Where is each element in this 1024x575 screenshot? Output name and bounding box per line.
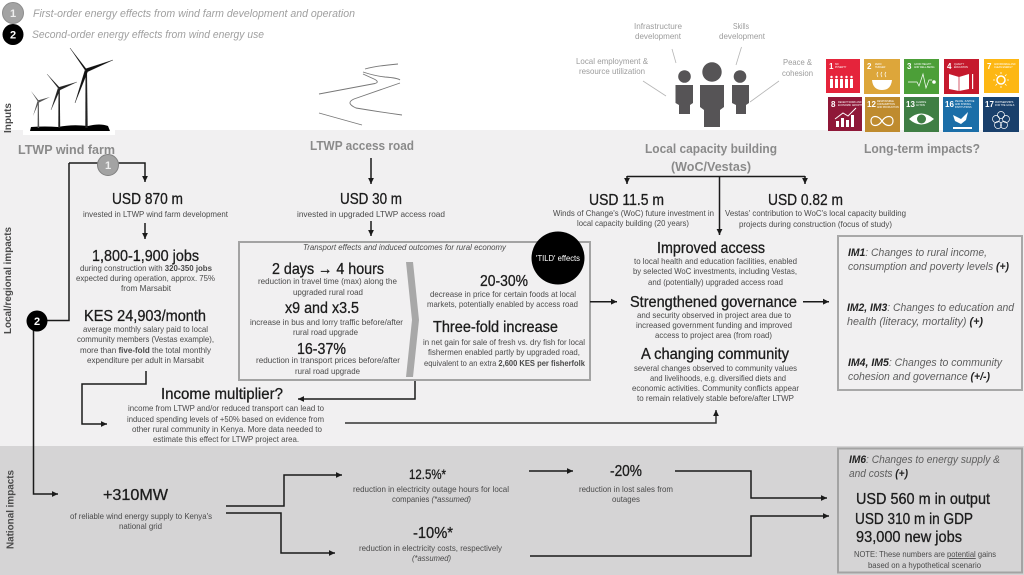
column: wind farm investment: USD 870 m (112, 191, 183, 208)
stat: transport prices: rural road upgrade (295, 366, 360, 376)
text block: salary: community members (Vestas example), (77, 334, 214, 344)
stat: fish sales (423, 319, 585, 368)
SDG 4: 4 (947, 62, 952, 71)
text block: strengthened governance (630, 294, 797, 340)
IM6 note: NOTE: These numbers are potential gains (854, 549, 996, 559)
IM6 heading: IM6: Changes to energy supply & (849, 454, 1000, 466)
text block: WoC investment: local capacity building (20 years) (577, 218, 689, 228)
SDG 4 (944, 59, 979, 94)
column: access road investment: USD 30 m (340, 191, 402, 208)
SDG 12: CONSUMPTION (877, 103, 895, 106)
SDG 1: 1 (829, 62, 834, 71)
text block: a changing community: to remain relatively stable before/after LTWP (637, 393, 794, 403)
heading: Local capacity building (645, 141, 777, 174)
text block: salary: KES 24,903/month (84, 308, 206, 325)
IM1: consumption and poverty levels (+) (848, 261, 1009, 273)
SDG 3 (904, 59, 939, 94)
text block: outage hours: companies (*assumed) (392, 494, 471, 504)
stat: food prices: decrease in price for certain foods at local (430, 289, 576, 299)
stat: travel time: reduction in travel time (max) along the (258, 276, 397, 286)
IM4, IM5: IM4, IM5: Changes to community (848, 357, 1003, 369)
SDG 1: NO (835, 63, 839, 66)
icon: people with capacity labels: development (719, 31, 766, 41)
text block: a changing community (632, 346, 799, 403)
row label: Inputs: Inputs (3, 103, 14, 133)
text block: outage hours (353, 467, 509, 504)
icon: winding road (319, 64, 402, 125)
stat: travel time (258, 261, 397, 297)
text block: +310MW: national grid (119, 521, 162, 531)
text block: jobs: during construction with 320-350 jobs (80, 263, 212, 273)
text block: improved access (633, 240, 797, 287)
text block: jobs: expected during operation, approx. 75% (76, 273, 215, 283)
IM1 (848, 247, 1009, 273)
icon grid: SDG tiles (826, 59, 1019, 132)
text block: salary: average monthly salary paid to local (83, 324, 208, 334)
IM4, IM5: cohesion and governance (+/-) (848, 371, 990, 383)
SDG 4: QUALITY (954, 63, 965, 66)
SDG 17: PARTNERSHIPS (995, 101, 1014, 104)
text block: Vestas contribution: Vestas' contribution to WoC's local capacity building (725, 208, 906, 218)
SDG 13: CLIMATE (916, 101, 927, 104)
SDG 16: 16 (945, 100, 954, 109)
SDG 8 (828, 97, 863, 131)
arrows: capacity building branch (627, 176, 805, 184)
text block: strengthened governance: increased government funding and improved (636, 320, 792, 330)
SDG 3: GOOD HEALTH (914, 63, 931, 66)
IM6 figures (855, 491, 991, 546)
SDG 8: ECONOMIC GROWTH (838, 104, 863, 107)
text block: strengthened governance: Strengthened governance (630, 294, 797, 311)
text block: outage hours: reduction in electricity outage hours for local (353, 484, 509, 494)
text block: income multiplier: Income multiplier? (161, 386, 283, 403)
text block: lost sales (579, 463, 673, 504)
text block: salary: expenditure per adult in Marsabit (87, 355, 205, 365)
arrow: transport box to outcomes (590, 301, 617, 303)
text block: jobs: 1,800-1,900 jobs (92, 248, 199, 265)
stat: travel time: 2 days → 4 hours (272, 261, 384, 278)
text block: WoC investment: USD 11.5 m (589, 192, 664, 209)
SDG 17: 17 (985, 100, 994, 109)
arrow: outcomes to long-term impacts (803, 301, 829, 303)
icon: people with capacity labels (576, 21, 813, 127)
SDG 7: AFFORDABLE AND (994, 63, 1016, 66)
SDG 2: HUNGER (875, 66, 886, 69)
SDG 7: CLEAN ENERGY (994, 66, 1013, 69)
arrow: supply to outage reduction (226, 475, 342, 506)
badge: second-order: 2 (34, 316, 40, 328)
stat: fish sales: in net gain for sale of fresh vs. dry fish for local (423, 337, 585, 347)
legend item 1: First-order energy effects from wind farm development and operation (33, 8, 355, 20)
text block: Vestas contribution: projects during construction (focus of study) (739, 219, 892, 229)
TILD badge (532, 232, 584, 284)
heading: LTWP access road: LTWP access road (310, 138, 414, 153)
text block: +310MW: of reliable wind energy supply to Kenya's (70, 511, 212, 521)
stat: food prices (427, 273, 578, 309)
arrow: transport box to income multiplier (298, 381, 415, 399)
SDG 1: POVERTY (835, 66, 847, 69)
legend item 2: 2 (10, 30, 16, 42)
SDG 17 (983, 97, 1019, 132)
SDG 16: INSTITUTIONS (955, 106, 972, 109)
SDG 2: 2 (867, 62, 872, 71)
column: wind farm investment (83, 191, 229, 219)
text block: strengthened governance: and security observed in project area due to (637, 310, 791, 320)
row label: Local/regional impacts: Local/regional impacts (3, 227, 14, 334)
SDG 16: PEACE, JUSTICE (955, 100, 975, 103)
people icon (676, 62, 749, 127)
arrow: road investment to transport box (370, 221, 372, 236)
IM1: IM1: Changes to rural income, (848, 247, 987, 259)
IM2, IM3: health (literacy, mortality) (+) (847, 316, 983, 328)
SDG 12: AND PRODUCTION (877, 106, 899, 109)
stat: food prices: markets, potentially enabled by access road (427, 299, 578, 309)
icon: people with capacity labels: cohesion (782, 68, 813, 78)
text block: a changing community: economic activities. Community conflicts appear (632, 383, 799, 393)
IM2, IM3: IM2, IM3: Changes to education and (847, 302, 1015, 314)
text block: jobs: from Marsabit (121, 283, 172, 293)
text block: Vestas contribution (725, 192, 906, 229)
text block: electricity costs: -10%* (413, 525, 453, 542)
arrow: investment to jobs (144, 223, 146, 239)
panel: transport effects (239, 232, 590, 380)
SDG 1 (826, 59, 860, 93)
legend (2, 2, 355, 45)
text block: a changing community: and livelihoods, e.g. diversified diets and (650, 373, 786, 383)
column: access road investment (297, 191, 445, 219)
column: wind farm investment: invested in LTWP wind farm development (83, 209, 229, 219)
text block: a changing community: A changing community (641, 346, 789, 363)
icon: wind turbines (23, 48, 115, 135)
IM6 note (854, 549, 996, 570)
SDG 13: 13 (906, 100, 915, 109)
stat: food prices: 20-30% (480, 273, 528, 290)
stat: fish sales: Three-fold increase (433, 319, 558, 336)
text block: lost sales: reduction in lost sales from (579, 484, 673, 494)
IM6 figures: USD 310 m in GDP (855, 511, 973, 528)
stat: transport prices: 16-37% (297, 341, 346, 358)
text block: income multiplier: induced spending levels of +50% based on evidence from (127, 414, 324, 424)
IM2, IM3 (847, 302, 1015, 328)
panel: long-term impacts IM1-5 (838, 236, 1022, 390)
SDG 13 (904, 97, 939, 132)
legend item 1: 1 (10, 8, 16, 20)
text block: salary: more than five-fold the total monthly (80, 345, 212, 355)
stat: transport prices (256, 341, 400, 376)
SDG 12: 12 (867, 100, 876, 109)
text block: income multiplier: other rural community in Kenya. More data needed to (132, 424, 322, 434)
SDG 4: EDUCATION (954, 66, 968, 69)
arrow: outage to lost sales (529, 470, 573, 472)
stat: transport prices: reduction in transport prices before/after (256, 355, 400, 365)
IM6 heading: and costs (+) (849, 468, 908, 480)
heading: LTWP wind farm: LTWP wind farm (18, 142, 115, 157)
capacity labels: Infrastructure (634, 21, 682, 31)
icon: people with capacity labels: development (635, 31, 682, 41)
text block: a changing community: several changes observed to community values (634, 363, 797, 373)
row label: National impacts: National impacts (6, 470, 16, 549)
IM6 note: based on a hypothetical scenario (868, 560, 981, 570)
SDG 7 (984, 59, 1019, 93)
SDG 8: DECENT WORK AND (838, 101, 862, 104)
IM6 figures: 93,000 new jobs (856, 529, 962, 546)
TILD badge: 'TILD' effects (536, 253, 580, 263)
SDG 3: 3 (907, 62, 912, 71)
SDG 13: ACTION (916, 104, 925, 107)
SDG 2: ZERO (875, 63, 882, 66)
text block: electricity costs: (*assumed) (412, 553, 451, 563)
text block: outage hours: 12.5%* (409, 467, 447, 482)
badge: second-order (26, 310, 48, 332)
badge: first-order (98, 154, 118, 176)
arrow: supply to cost reduction (226, 513, 335, 553)
stat: traffic: rural road upgrade (293, 327, 358, 337)
SDG 3: AND WELL-BEING (914, 66, 935, 69)
text block: WoC investment: Winds of Change's (WoC) future investment in (553, 208, 714, 218)
heading: Local capacity building: Local capacity building (645, 141, 777, 156)
text block: +310MW: +310MW (103, 487, 168, 504)
arrow: income multiplier to changing community (345, 410, 716, 423)
column: access road investment: invested in upgraded LTWP access road (297, 209, 445, 219)
panel: IM6 national impacts (838, 448, 1022, 572)
text block: income multiplier: estimate this effect for LTWP project area. (153, 434, 299, 444)
SDG 12 (865, 97, 900, 132)
arrows: wind farm branch (69, 163, 145, 182)
arrow: road heading to investment (370, 158, 372, 184)
icon: people with capacity labels: Peace & (783, 57, 812, 67)
arrow: capacity building to improved access (718, 176, 720, 235)
IM6 heading (849, 454, 1000, 480)
legend item 1 (2, 2, 355, 24)
text block: Vestas contribution: USD 0.82 m (768, 192, 843, 209)
arrow: salary to income multiplier (82, 371, 146, 424)
badge: first-order: 1 (105, 160, 111, 172)
SDG 8: 8 (831, 100, 836, 109)
icon: people with capacity labels: Local employment & (576, 56, 648, 66)
text block: salary (77, 308, 214, 365)
stat: traffic (250, 300, 403, 337)
arrow: order 2 to national grid (34, 325, 58, 494)
SDG 12: RESPONSIBLE (877, 100, 894, 103)
stat: traffic: x9 and x3.5 (285, 300, 359, 317)
IM4, IM5 (848, 357, 1003, 383)
legend item 2: Second-order energy effects from wind energy use (32, 29, 264, 41)
chevron (406, 262, 419, 377)
text block: electricity costs (359, 525, 503, 563)
legend item 2 (2, 24, 264, 45)
text block: strengthened governance: access to project area (from road) (655, 330, 772, 340)
icon: people with capacity labels: resource utilization (579, 66, 645, 76)
spoke lines (643, 47, 779, 102)
SDG 16: AND STRONG (955, 103, 971, 106)
heading: Long-term impacts: Long-term impacts? (864, 141, 980, 156)
SDG 16 (943, 97, 979, 132)
text block: income multiplier: income from LTWP and/or reduced transport can lead to (128, 403, 324, 413)
connector: order 1 to order 2 (38, 163, 69, 320)
SDG 7: 7 (987, 62, 992, 71)
IM6 figures: USD 560 m in output (856, 491, 991, 508)
text block: lost sales: outages (612, 494, 640, 504)
text block: improved access: to local health and education facilities, enabled (634, 256, 797, 266)
stat: fish sales: fishermen enabled partly by upgraded road, (428, 347, 580, 357)
arrow: lost sales to national impacts (675, 471, 827, 498)
stat: travel time: upgraded rural road (293, 287, 363, 297)
icon: people with capacity labels: Skills (733, 21, 749, 31)
text block: +310MW (70, 487, 212, 531)
text block: income multiplier (127, 386, 324, 444)
panel title: Transport effects and induced outcomes for rural economy (303, 242, 507, 252)
text block: improved access: by selected WoC investments, including Vestas, (633, 266, 797, 276)
heading: Local capacity building: (WoC/Vestas) (671, 159, 751, 174)
text block: electricity costs: reduction in electricity costs, respectively (359, 543, 503, 553)
stat: traffic: increase in bus and lorry traffic before/after (250, 317, 403, 327)
text block: improved access: Improved access (657, 240, 765, 257)
arrow: costs to national impacts (530, 516, 829, 556)
SDG 17: FOR THE GOALS (995, 104, 1015, 107)
text block: jobs (76, 248, 215, 293)
text block: improved access: and (potentially) upgraded access road (648, 277, 783, 287)
text block: WoC investment (553, 192, 714, 228)
stat: fish sales: equivalent to an extra 2,600 KES per fisherfolk (424, 358, 585, 368)
text block: lost sales: -20% (610, 463, 642, 480)
SDG 2 (864, 59, 900, 94)
